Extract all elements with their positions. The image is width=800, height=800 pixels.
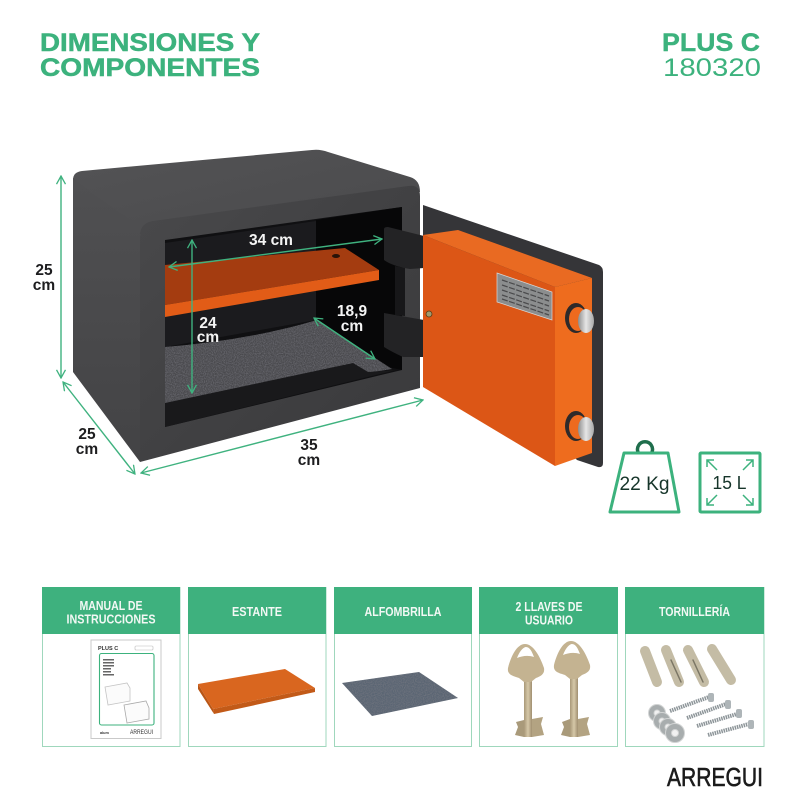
panel: manual de instrucciones (42, 587, 180, 746)
door back plate (423, 205, 603, 467)
manual cover illustration: PLUS C (98, 646, 118, 652)
icon: weight (610, 442, 679, 512)
screws (670, 697, 749, 735)
model name and reference (662, 29, 761, 82)
arrow: interior height (191, 240, 193, 393)
arrow: interior depth (314, 318, 375, 359)
door orange side (555, 278, 592, 466)
dimension arrows (61, 176, 423, 474)
icon: weight: 22 Kg (620, 474, 670, 495)
hinges (384, 227, 424, 357)
title: DIMENSIONES Y (40, 29, 260, 57)
model name and reference: PLUS C (662, 29, 760, 57)
dimension labels: exterior: cm (33, 277, 55, 294)
door label plate (497, 273, 552, 320)
safe interior (165, 207, 402, 427)
safe front face (140, 186, 420, 462)
icon: volume (700, 453, 760, 512)
arrow: exterior width (141, 400, 423, 473)
wall plugs (645, 649, 731, 682)
panel: alfombrilla: ALFOMBRILLA (364, 604, 442, 619)
shelf illustration (198, 669, 315, 714)
dimension labels: interior: cm (341, 318, 363, 335)
upper knob (565, 303, 594, 333)
panel: alfombrilla (334, 587, 472, 746)
safe left side (73, 178, 140, 462)
mat illustration (342, 672, 458, 716)
panel: tornillería: TORNILLERÍA (659, 604, 730, 619)
dimension labels: exterior: 25 (78, 426, 96, 443)
panel: estante: ESTANTE (232, 604, 282, 619)
panel: llaves (479, 587, 618, 746)
model name and reference: 180320 (663, 54, 761, 82)
front lip (165, 363, 396, 427)
orange shelf (165, 248, 379, 317)
key two (554, 641, 590, 737)
manual cover illustration: alum (100, 731, 109, 735)
dimension labels: exterior (33, 262, 320, 469)
panel: manual de instrucciones: MANUAL DE (80, 598, 143, 613)
dimension labels: exterior: cm (76, 441, 98, 458)
dimension labels: interior: cm (197, 329, 219, 346)
washers (648, 704, 684, 742)
panel: llaves: 2 LLAVES DE (516, 599, 583, 614)
logo: ARREGUI (667, 762, 763, 792)
dimension labels: exterior: 25 (35, 262, 53, 279)
dimension labels: interior: 34 cm (249, 232, 293, 249)
safe top face (73, 150, 420, 236)
title: COMPONENTES (40, 54, 260, 82)
panel: estante (188, 587, 326, 746)
lower knob (565, 411, 594, 441)
door orange face (423, 235, 555, 466)
panel: tornillería (625, 587, 764, 746)
arrow: exterior depth (63, 382, 135, 474)
panel: manual de instrucciones: INSTRUCCIONES (66, 612, 156, 626)
door (423, 205, 603, 467)
icon: volume: 15 L (712, 472, 746, 493)
dimension labels: interior: 24 (199, 315, 217, 332)
dimension labels: interior: 18,9 (337, 303, 367, 320)
panel: llaves: USUARIO (525, 612, 573, 628)
door lock pin (426, 311, 432, 317)
safe body (73, 150, 424, 462)
arrow: interior width (169, 239, 382, 267)
dimension labels: exterior: 35 (300, 437, 318, 454)
door orange top bevel (423, 230, 592, 287)
dimension labels: exterior: cm (298, 452, 320, 469)
title (40, 29, 260, 82)
felt mat (165, 320, 392, 405)
key one (508, 644, 544, 737)
arrow: exterior height (60, 176, 62, 378)
dimension labels: interior (197, 232, 367, 346)
screw heads (708, 693, 754, 729)
manual cover illustration: ARREGUI (130, 730, 153, 736)
manual cover illustration (91, 640, 161, 738)
